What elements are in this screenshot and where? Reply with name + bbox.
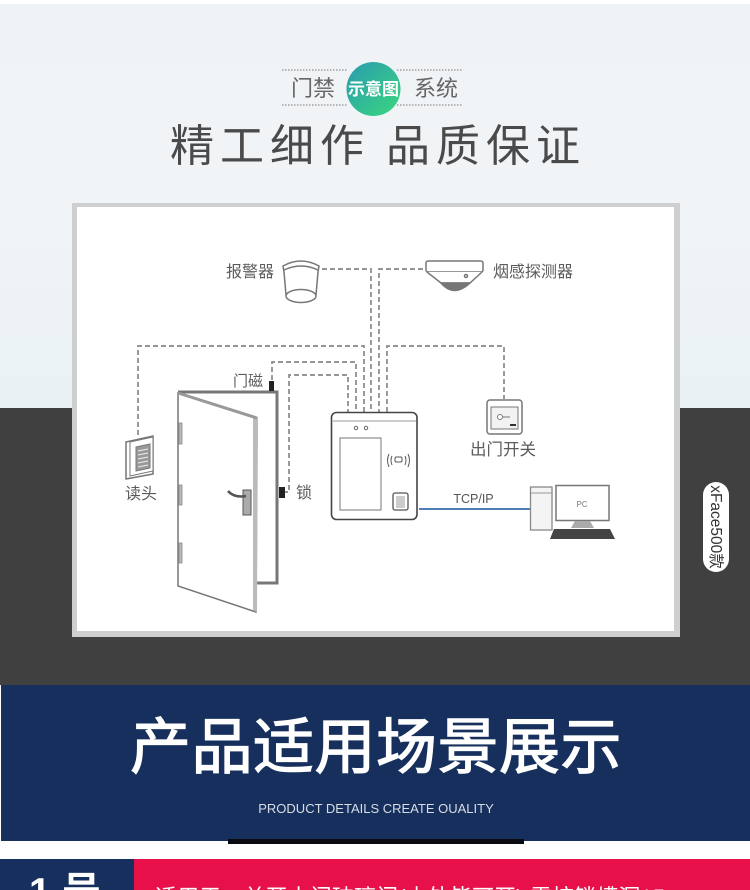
label: 烟感探测器: 烟感探测器	[493, 263, 573, 281]
side label pill: xFace500款	[703, 482, 729, 572]
icon: card reader	[126, 436, 153, 479]
icon: alarm	[283, 261, 319, 302]
badge: number 1	[0, 859, 134, 890]
label: TCP/IP: TCP/IP	[453, 492, 494, 506]
icon: lock	[279, 487, 285, 498]
badge: 示意图: 示意图	[348, 79, 399, 99]
background: lower dark section	[0, 408, 750, 685]
icon: PC: PC	[576, 500, 588, 509]
icon: door	[178, 392, 277, 612]
label: 门磁: 门磁	[233, 373, 263, 390]
label: 系统: 系统	[414, 76, 458, 101]
icon: smoke detector	[426, 261, 483, 290]
label: 门禁: 门禁	[291, 76, 335, 101]
label: 读头: 读头	[125, 485, 157, 503]
banner subtitle: PRODUCT DETAILS CREATE OUALITY	[258, 801, 494, 816]
strip: applicability note	[134, 859, 750, 890]
label: 出门开关: 出门开关	[470, 440, 536, 459]
connection: TCP/IP line	[419, 508, 531, 510]
label: 锁: 锁	[296, 484, 312, 502]
main title: 精工细作品质保证	[170, 122, 580, 171]
banner underline bar	[228, 839, 524, 844]
section heading: access control diagram	[282, 62, 463, 116]
icon: exit switch	[487, 400, 522, 434]
icon: terminal device	[332, 412, 417, 520]
dotted rules	[282, 70, 463, 105]
side label pill: xFace500款: xFace500款	[707, 485, 725, 569]
banner heading: 产品适用场景展示	[130, 713, 622, 781]
banner: product scenarios	[1, 685, 750, 844]
label: 报警器: 报警器	[226, 263, 274, 281]
background: upper light section	[0, 4, 750, 408]
badge: 示意图	[346, 62, 400, 116]
panel: wiring diagram card	[72, 203, 680, 637]
icon: PC	[530, 486, 615, 539]
dashed wiring	[138, 269, 504, 492]
icon: door magnet	[269, 381, 274, 391]
